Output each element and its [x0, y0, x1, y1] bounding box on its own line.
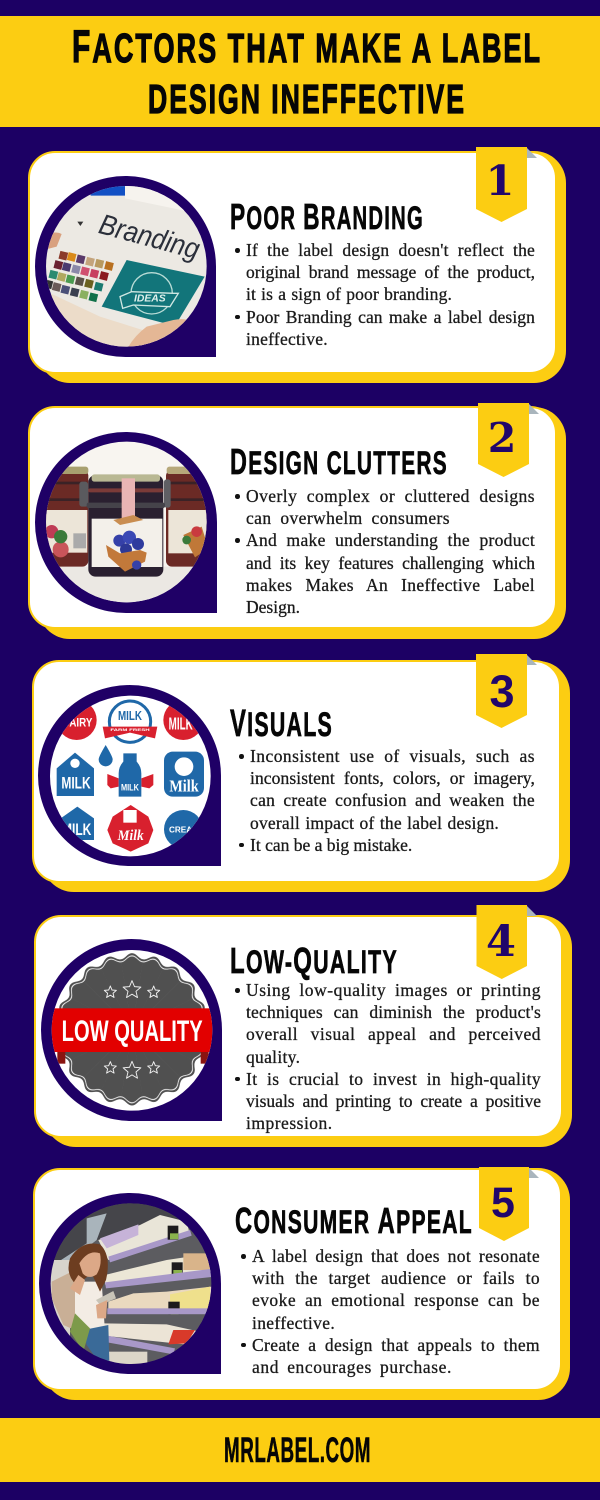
image: low quality badge: [50, 948, 215, 1113]
photo: branding swatches and ideas card: IDEAS: [134, 294, 166, 305]
ribbon: number 5: [479, 1167, 539, 1241]
ribbon: number 2: 2: [488, 414, 516, 462]
ribbon: number 4: [476, 905, 537, 979]
photo: branding swatches and ideas card: [43, 183, 213, 350]
text: design clutters points: can overwhelm consumers: [246, 508, 450, 528]
text: poor branding points: Poor Branding can make a label design: [246, 307, 535, 327]
text: low quality points: visuals and printing to create a positive: [246, 1091, 541, 1111]
ribbon: number 1: [476, 147, 537, 222]
photo: milk label collection: MILK: [61, 773, 91, 792]
text: design clutters points: makes Makes An Ineffective Label: [246, 575, 535, 595]
text: low quality points: impression.: [246, 1113, 333, 1133]
photo: milk label collection: FARM FRESH: [110, 727, 150, 732]
text: visuals points: can create confusion and weaken the: [250, 790, 535, 810]
photo: milk label collection: MILK: [169, 713, 193, 733]
photo: milk label collection: Milk: [169, 776, 199, 795]
ribbon: number 3: [476, 654, 537, 728]
photo: milk label collection: Milk: [117, 828, 144, 844]
text: poor branding points: original brand message of the product,: [246, 262, 535, 282]
photo: branding swatches and ideas card: Branding: [96, 209, 203, 266]
card background: [34, 1168, 570, 1400]
photo: shopper at supermarket shelf: [48, 1202, 215, 1368]
footer banner: [0, 1418, 600, 1482]
heading: POOR BRANDING: [230, 196, 424, 237]
text: consumer appeal points: ineffective.: [252, 1313, 335, 1333]
text: consumer appeal points: evoke an emotional response can be: [252, 1290, 540, 1310]
text: design clutters points: Design.: [246, 597, 300, 617]
panel: 4 low quality: [34, 905, 572, 1147]
image frame: [41, 939, 222, 1121]
text: poor branding points: ineffective.: [246, 329, 328, 349]
photo: milk label collection: CREAM: [169, 826, 199, 835]
footer website: MRLABEL.COM: [224, 1431, 371, 1470]
text: poor branding points: [235, 240, 535, 349]
text: low quality points: Using low-quality images or printing: [246, 980, 541, 1000]
text: visuals points: inconsistent fonts, colors, or imagery,: [250, 768, 535, 788]
card background: [29, 151, 566, 383]
text: poor branding points: If the label design doesn't reflect the: [246, 240, 535, 260]
photo: jam jars: [43, 440, 212, 607]
photo: milk label collection: [47, 693, 213, 860]
image frame: [39, 1193, 221, 1374]
ribbon: number 5: 5: [491, 1179, 515, 1227]
text: design clutters points: And make understanding the product: [246, 530, 535, 550]
text: design clutters points: [235, 486, 535, 618]
text: consumer appeal points: with the target audience or fails to: [252, 1268, 540, 1288]
text: consumer appeal points: and encourages purchase.: [252, 1357, 452, 1377]
ribbon: number 4: 4: [486, 917, 516, 967]
ribbon: number 1: 1: [486, 157, 514, 205]
heading: VISUALS: [230, 703, 333, 745]
image frame: [38, 685, 221, 866]
text: design clutters points: and its key features challenging which: [246, 553, 535, 573]
panel: 3 visuals: [32, 654, 570, 892]
text: low quality points: overall visual appeal and perceived: [246, 1024, 541, 1044]
ribbon: number 3: 3: [489, 666, 515, 717]
text: low quality points: It is crucial to invest in high-quality: [246, 1069, 541, 1089]
photo: milk label collection: MILK: [118, 708, 142, 723]
text: consumer appeal points: [241, 1246, 540, 1378]
text: consumer appeal points: Create a design that appeals to them: [252, 1335, 540, 1355]
text: visuals points: It can be a big mistake.: [250, 835, 412, 855]
text: consumer appeal points: A label design that does not resonate: [252, 1246, 540, 1266]
panel: 2 design clutters: [28, 403, 566, 639]
panel: 1 poor branding: [28, 147, 566, 383]
image frame: [35, 176, 216, 357]
title: [72, 21, 542, 122]
heading: CONSUMER APPEAL: [235, 1200, 473, 1241]
image frame: [35, 432, 217, 613]
text: visuals points: [239, 746, 535, 856]
panel: 5 consumer appeal: [33, 1167, 570, 1400]
photo: milk label collection: MILK: [62, 820, 91, 839]
card background: [29, 407, 566, 639]
heading: LOW-QUALITY: [230, 940, 398, 981]
ribbon: number 2: [478, 403, 539, 477]
photo: milk label collection: MILK: [121, 783, 139, 793]
text: design clutters points: Overly complex or cluttered designs: [246, 486, 535, 506]
text: low quality points: [235, 980, 541, 1134]
title banner: [0, 16, 600, 127]
text: visuals points: overall impact of the label design.: [250, 813, 499, 833]
card background: [33, 661, 570, 892]
text: low quality points: quality.: [246, 1047, 300, 1067]
heading: DESIGN CLUTTERS: [230, 441, 448, 482]
card background: [35, 915, 572, 1147]
text: low quality points: techniques can diminish the product's: [246, 1002, 541, 1022]
text: visuals points: Inconsistent use of visuals, such as: [250, 746, 535, 766]
photo: milk label collection: DAIRY: [62, 716, 92, 730]
image: low quality badge: LOW QUALITY: [62, 1015, 203, 1048]
text: poor branding points: it is a sign of poor branding.: [246, 284, 452, 304]
